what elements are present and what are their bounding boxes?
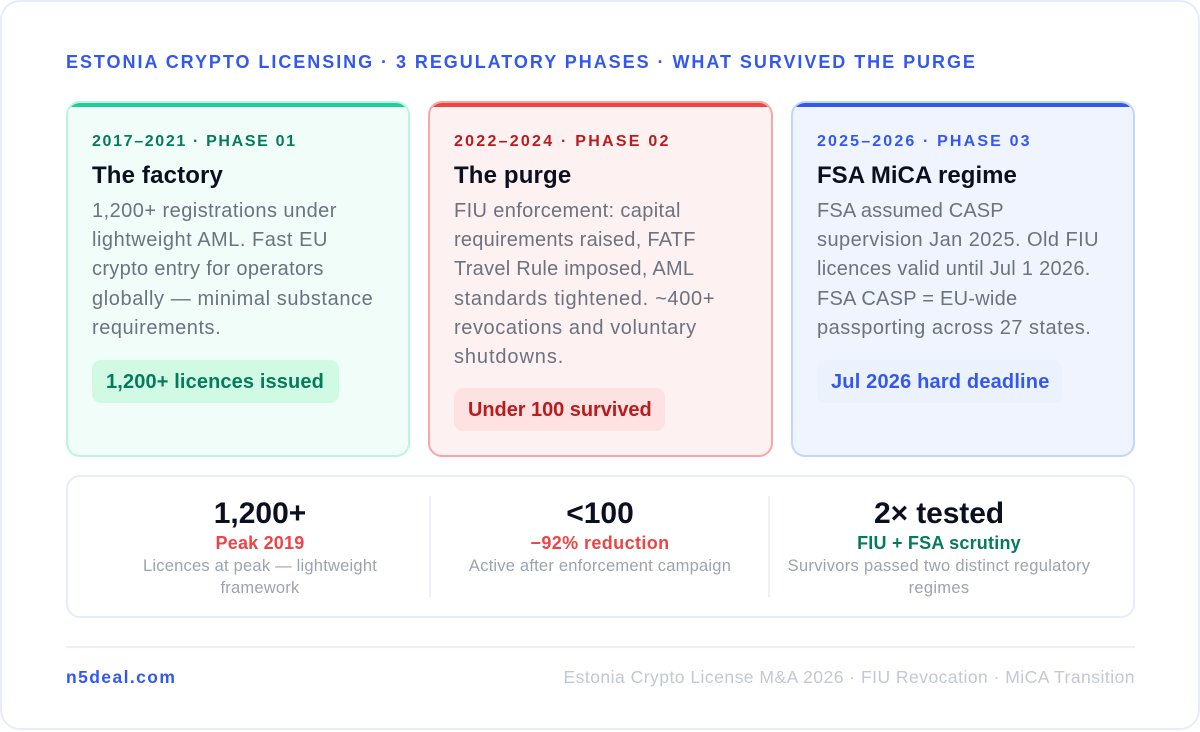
phase 02 description — [454, 200, 715, 368]
stat: peak: 1,200+ — [214, 497, 306, 530]
panel: phase 02 — [428, 101, 773, 457]
phase 01 label: 2017–2021 · PHASE 01 — [92, 133, 297, 150]
divider — [429, 496, 431, 597]
phase 02 description: requirements raised, FATF — [454, 229, 696, 251]
title: ESTONIA CRYPTO LICENSING · 3 REGULATORY PHASES · WHAT SURVIVED THE PURGE — [66, 52, 977, 72]
stat: tested: FIU + FSA scrutiny — [857, 533, 1021, 553]
phase 01 heading: The factory — [92, 162, 223, 189]
phase 03 description: FSA CASP = EU-wide — [817, 288, 1017, 310]
footer brand: n5deal.com — [66, 667, 176, 687]
phase 03 badge: Jul 2026 hard deadline — [831, 371, 1050, 393]
phase 01 description: lightweight AML. Fast EU — [92, 229, 328, 251]
phase 02 badge — [454, 388, 665, 431]
footer rule — [66, 646, 1135, 648]
phase 01 description: 1,200+ registrations under — [92, 200, 337, 222]
stat: peak — [143, 497, 377, 596]
phase 02 heading: The purge — [454, 162, 571, 189]
stat: tested — [788, 497, 1090, 596]
stat: tested: Survivors passed two distinct regulatory — [788, 557, 1090, 575]
phase 03 label: 2025–2026 · PHASE 03 — [817, 133, 1032, 150]
phase 01 description: globally — minimal substance — [92, 288, 373, 310]
panel: stats row — [66, 475, 1135, 618]
stat: survivors: −92% reduction — [530, 533, 670, 553]
phase 03 description: FSA assumed CASP — [817, 200, 1004, 222]
stat: tested: regimes — [909, 578, 969, 596]
phase 03 description: passporting across 27 states. — [817, 317, 1091, 339]
phase 03 heading: FSA MiCA regime — [817, 162, 1017, 189]
stat: survivors: Active after enforcement campaign — [469, 557, 731, 575]
phase 01 description — [92, 200, 373, 339]
phase 01 badge — [92, 360, 339, 403]
phase 03 badge — [817, 360, 1062, 403]
phase 02 badge: Under 100 survived — [468, 399, 652, 421]
panel: phase 03 — [791, 101, 1135, 457]
phase 02 description: Travel Rule imposed, AML — [454, 258, 694, 280]
phase 02 description: FIU enforcement: capital — [454, 200, 681, 222]
phase 02 label: 2022–2024 · PHASE 02 — [454, 133, 671, 150]
phase 03 description: supervision Jan 2025. Old FIU — [817, 229, 1099, 251]
stat: peak: framework — [220, 578, 300, 596]
stat: survivors — [469, 497, 731, 575]
phase 03 description — [817, 200, 1099, 339]
phase 02 description: standards tightened. ~400+ — [454, 288, 715, 310]
phase 02 description: revocations and voluntary — [454, 317, 697, 339]
stat: survivors: <100 — [566, 497, 634, 530]
phase 01 badge: 1,200+ licences issued — [106, 371, 324, 393]
phase 01 description: crypto entry for operators — [92, 258, 324, 280]
panel: phase 01 — [66, 101, 410, 457]
stat: peak: Peak 2019 — [216, 533, 304, 553]
divider — [768, 496, 770, 597]
stat: tested: 2× tested — [874, 497, 1004, 530]
phase 02 description: shutdowns. — [454, 346, 564, 368]
phase 01 description: requirements. — [92, 317, 221, 339]
phase 03 description: licences valid until Jul 1 2026. — [817, 258, 1091, 280]
stat: peak: Licences at peak — lightweight — [143, 557, 377, 575]
footer source: Estonia Crypto License M&A 2026 · FIU Revocation · MiCA Transition — [564, 667, 1135, 687]
